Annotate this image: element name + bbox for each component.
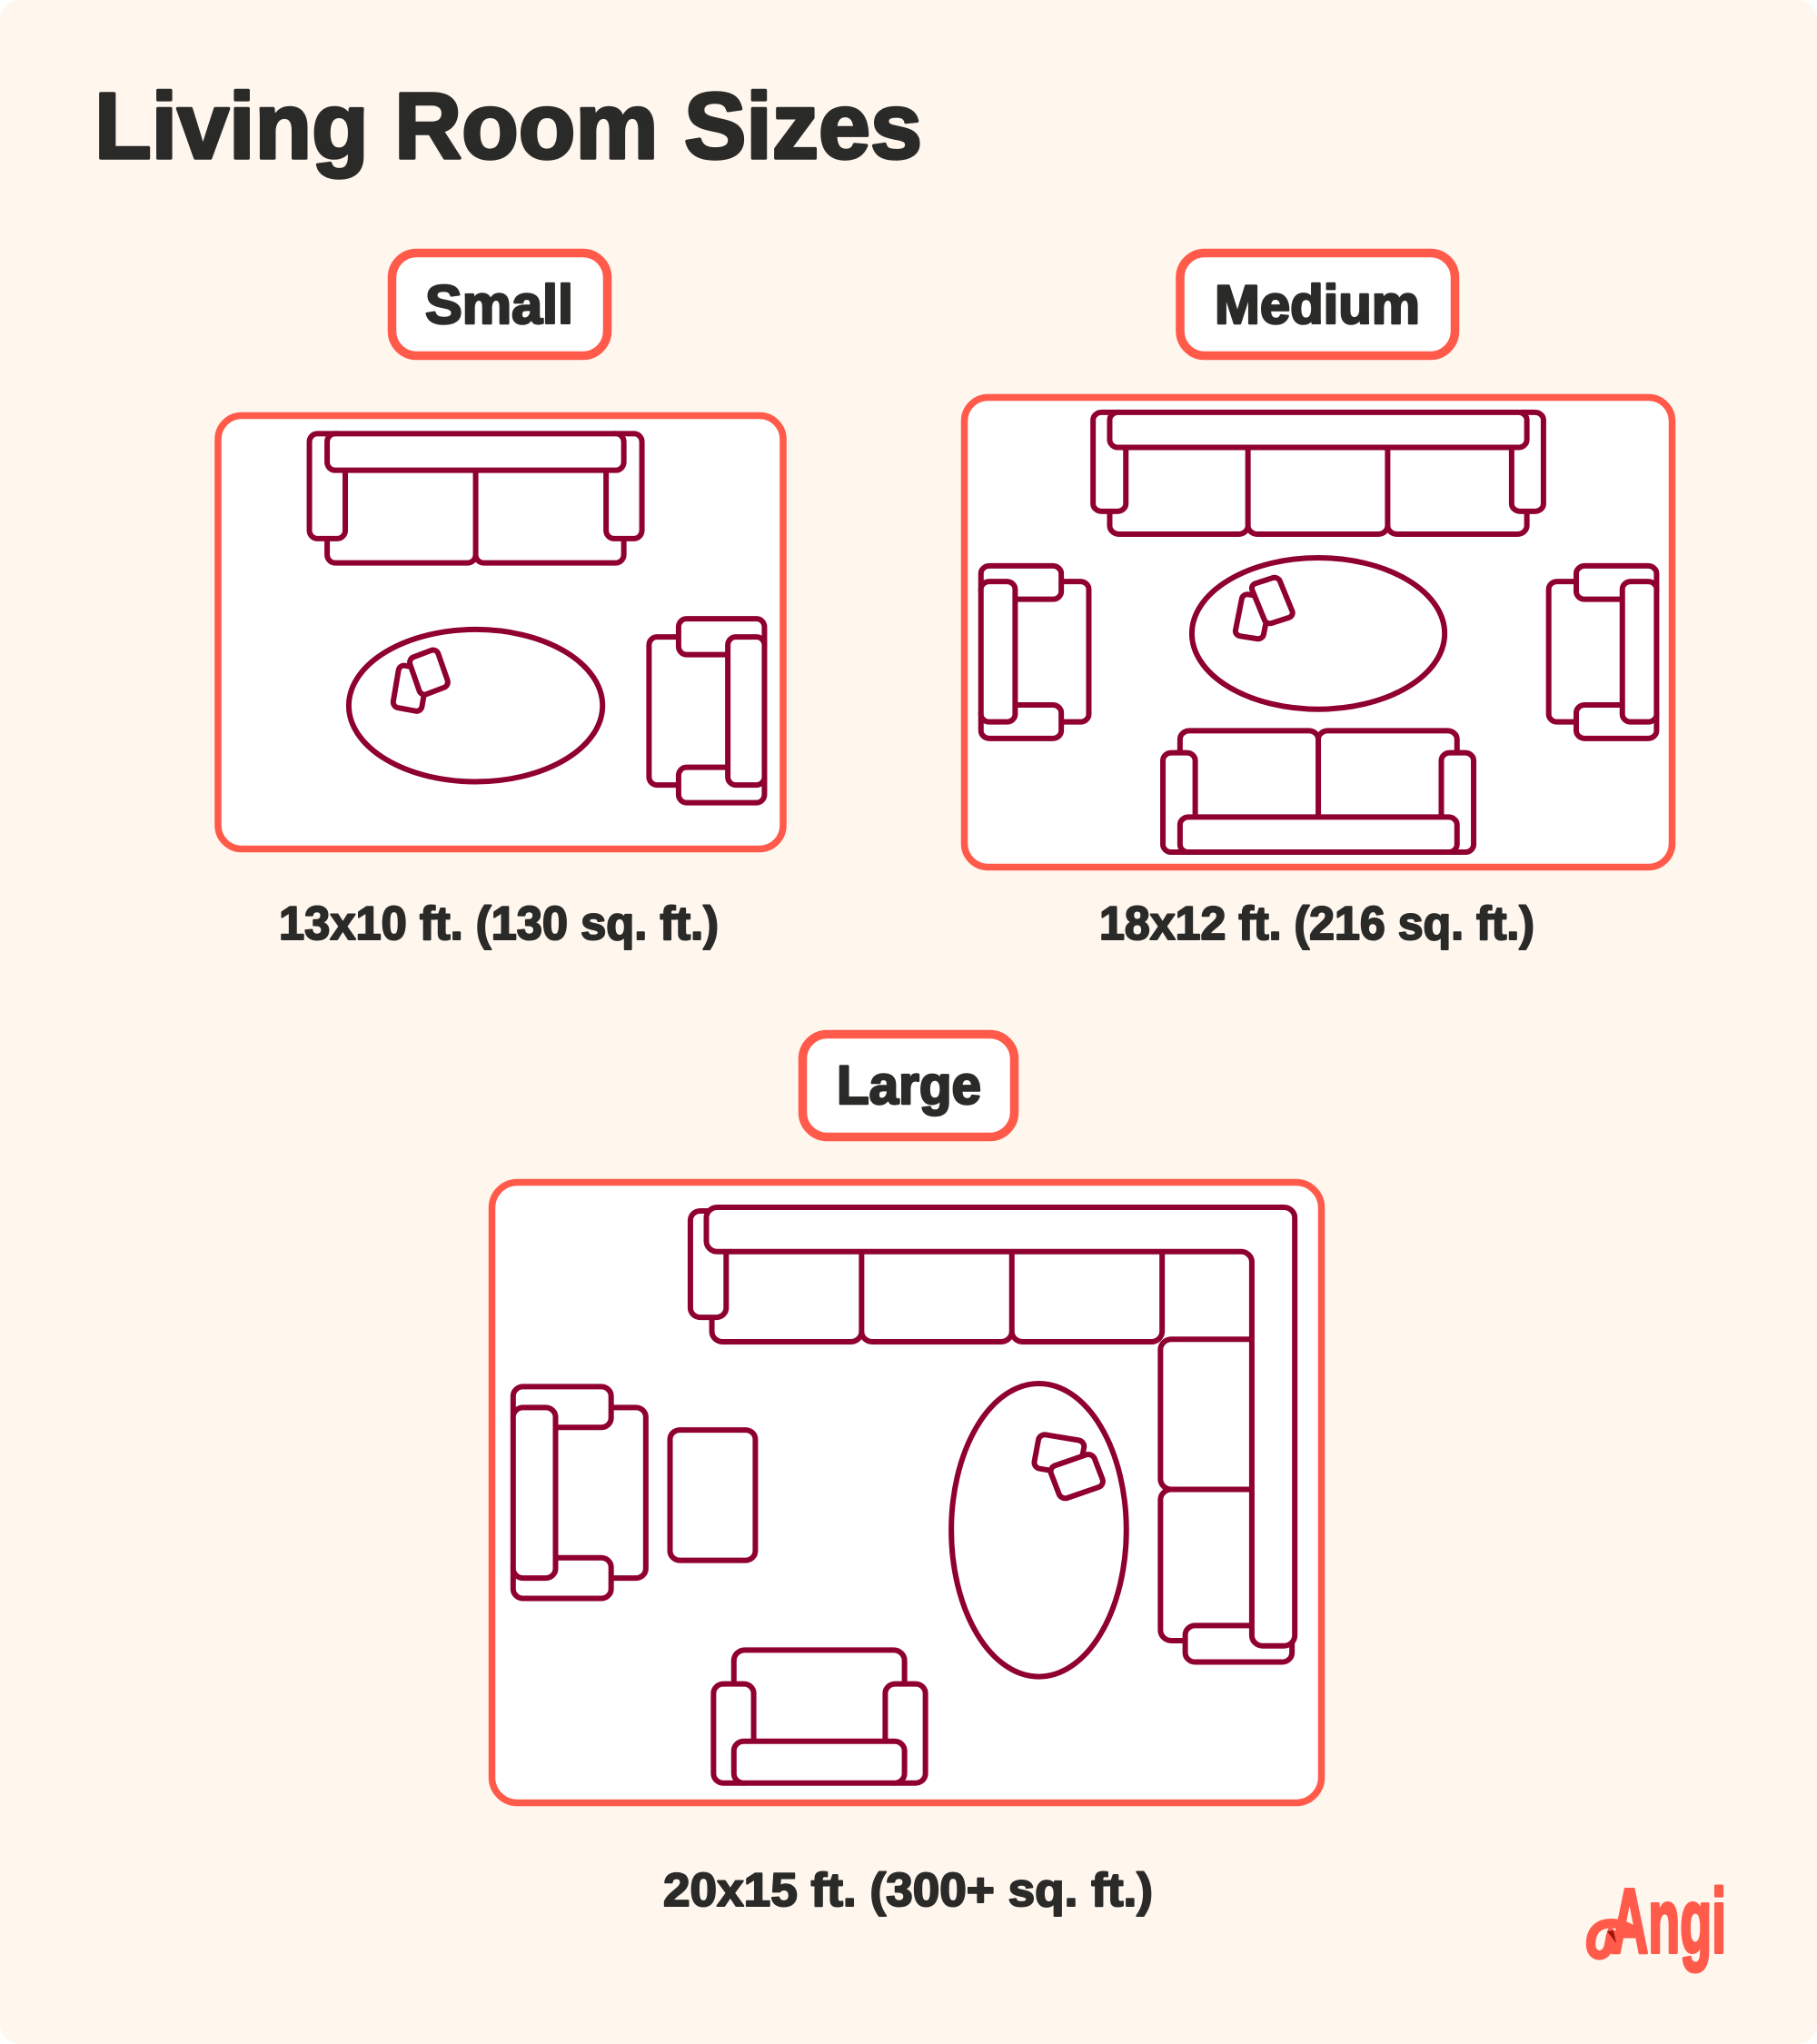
caption: large: 20x15 ft. (300+ sq. ft.) bbox=[663, 1864, 1153, 1917]
room outline: medium bbox=[965, 398, 1672, 867]
panel: small room bbox=[218, 253, 783, 950]
title: Living Room Sizes bbox=[94, 74, 922, 178]
bottom sofa bbox=[1163, 730, 1474, 852]
room outline: large bbox=[492, 1183, 1321, 1802]
right armchair bbox=[1549, 566, 1656, 739]
panel: medium room bbox=[965, 253, 1672, 950]
coffee table with books bbox=[951, 1384, 1127, 1677]
badge: small bbox=[392, 253, 607, 356]
caption: small: 13x10 ft. (130 sq. ft.) bbox=[279, 898, 719, 950]
badge: small: Small bbox=[425, 274, 573, 335]
ottoman bbox=[670, 1430, 755, 1561]
sofa bbox=[310, 433, 642, 563]
badge: large bbox=[803, 1034, 1014, 1137]
badge: medium: Medium bbox=[1215, 274, 1420, 335]
floor plan: large room furniture bbox=[513, 1207, 1295, 1783]
room outline: small bbox=[218, 416, 783, 848]
armchair bbox=[513, 1386, 646, 1598]
badge: large: Large bbox=[837, 1055, 981, 1116]
left armchair bbox=[981, 566, 1088, 739]
top sofa bbox=[1093, 412, 1544, 534]
floor plan: small room furniture bbox=[310, 433, 764, 803]
floor plan: medium room furniture bbox=[981, 412, 1656, 852]
badge: medium bbox=[1180, 253, 1455, 356]
logo: Angi bbox=[1591, 1870, 1726, 1972]
panel: large room bbox=[492, 1034, 1321, 1917]
bottom armchair bbox=[713, 1650, 926, 1783]
logo: Angi: Angi bbox=[1611, 1870, 1726, 1972]
caption: medium: 18x12 ft. (216 sq. ft.) bbox=[1099, 898, 1534, 950]
armchair bbox=[649, 619, 764, 803]
coffee table with books bbox=[1192, 558, 1445, 709]
sectional sofa bbox=[690, 1207, 1295, 1662]
coffee table with books bbox=[349, 630, 602, 782]
